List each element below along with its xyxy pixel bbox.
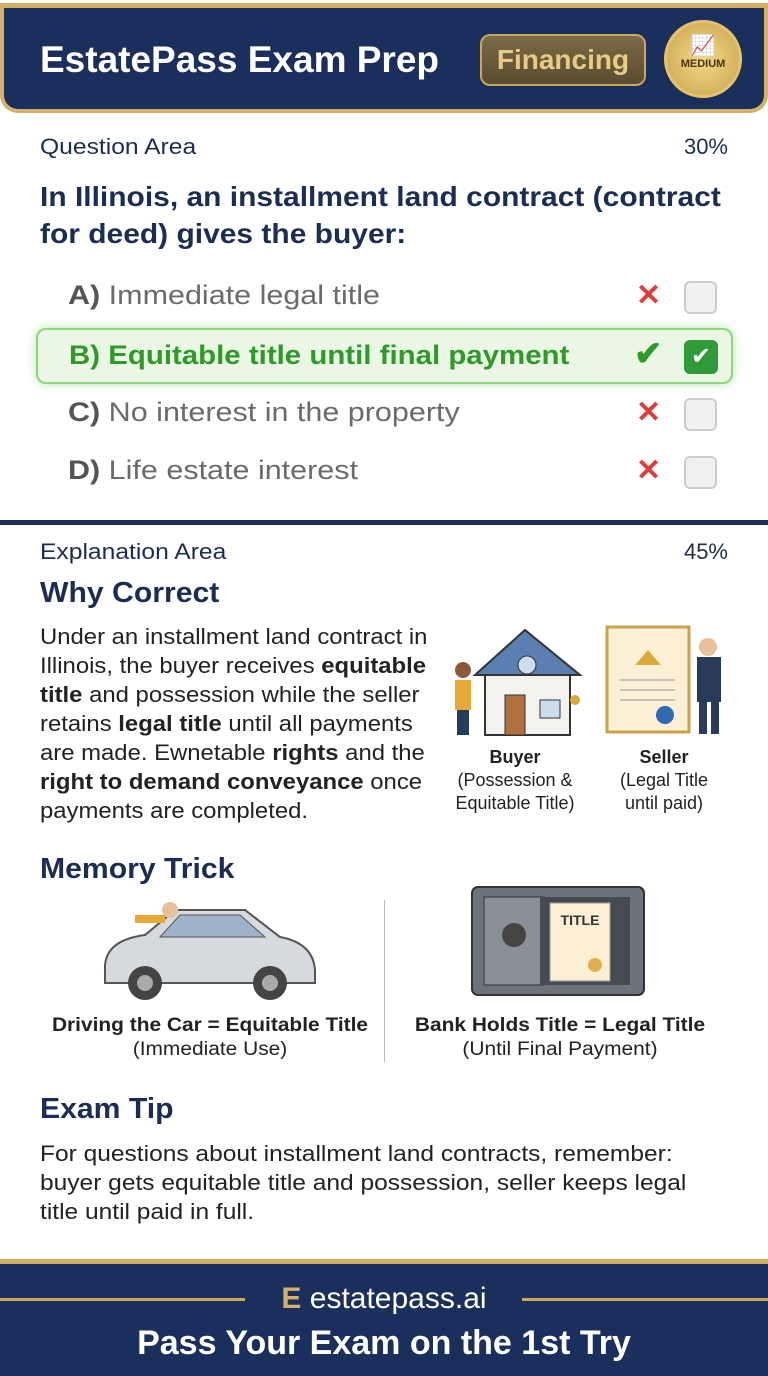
car caption: Driving the Car = Equitable Title: [52, 1015, 368, 1036]
footer: [0, 1259, 768, 1376]
car caption: (Immediate Use): [133, 1039, 287, 1060]
why correct text: Illinois, the buyer receives equitable: [40, 653, 426, 678]
title: EstatePass Exam Prep: [40, 39, 439, 80]
option B correct: B) Equitable title until final payment: [69, 340, 569, 370]
illustration: safe: TITLE: [561, 912, 599, 928]
safe caption: [415, 1015, 705, 1060]
why correct text: [40, 624, 427, 823]
seller caption: [620, 747, 708, 813]
difficulty medal: 📈: [691, 35, 715, 57]
option C: C) No interest in the property: [68, 397, 460, 427]
illustration: safe: [471, 886, 645, 996]
category pill: Financing: [497, 44, 629, 75]
why correct heading: Why Correct: [40, 577, 219, 609]
option A: ✕: [636, 279, 661, 312]
illustration: buyer house: [455, 628, 583, 736]
explanation area label: Explanation Area: [40, 539, 226, 564]
text: 30%: [684, 134, 728, 159]
option C: [68, 396, 717, 431]
exam tip text: title until paid in full.: [40, 1199, 254, 1224]
option D: ✕: [636, 454, 661, 487]
why correct text: retains legal title until all payments: [40, 711, 413, 736]
option A: A) Immediate legal title: [68, 280, 380, 310]
footer logo: E estatepass.ai: [281, 1282, 487, 1315]
question area label: Question Area: [40, 134, 196, 159]
question: [40, 181, 721, 249]
option D: D) Life estate interest: [68, 455, 358, 485]
option B correct: ✔: [634, 335, 662, 373]
option B correct: ✔: [691, 343, 711, 370]
difficulty medal: MEDIUM: [681, 58, 725, 70]
car caption: [52, 1015, 368, 1060]
buyer caption: Equitable Title): [455, 793, 575, 813]
buyer caption: Buyer: [489, 747, 541, 767]
illustration: seller deed: [606, 626, 721, 734]
text: 45%: [684, 539, 728, 564]
buyer caption: (Possession &: [457, 770, 573, 790]
option A: [68, 279, 717, 314]
option D: [68, 454, 717, 489]
exam tip text: For questions about installment land contracts, remember:: [40, 1141, 673, 1166]
seller caption: until paid): [625, 793, 703, 813]
difficulty medal: [664, 20, 742, 98]
buyer caption: [455, 747, 575, 813]
seller caption: Seller: [639, 747, 689, 767]
memory trick heading: Memory Trick: [40, 853, 234, 885]
exam tip text: buyer gets equitable title and possession, seller keeps legal: [40, 1170, 686, 1195]
category pill: [480, 34, 646, 86]
header banner: [0, 3, 768, 113]
safe caption: (Until Final Payment): [462, 1039, 658, 1060]
option C: ✕: [636, 396, 661, 429]
why correct text: right to demand conveyance once: [40, 769, 422, 794]
safe caption: Bank Holds Title = Legal Title: [415, 1015, 705, 1036]
exam tip heading: Exam Tip: [40, 1093, 174, 1125]
why correct text: title and possession while the seller: [40, 682, 419, 707]
why correct text: are made. Ewnetable rights and the: [40, 740, 425, 765]
why correct text: payments are completed.: [40, 798, 308, 823]
footer tagline: Pass Your Exam on the 1st Try: [137, 1324, 631, 1362]
exam tip text: [40, 1141, 686, 1224]
illustration: car: [104, 902, 316, 1000]
option B correct: [36, 328, 733, 384]
seller caption: (Legal Title: [620, 770, 708, 790]
question: In Illinois, an installment land contract (contract: [40, 181, 721, 212]
question: for deed) gives the buyer:: [40, 218, 406, 249]
why correct text: Under an installment land contract in: [40, 624, 427, 649]
